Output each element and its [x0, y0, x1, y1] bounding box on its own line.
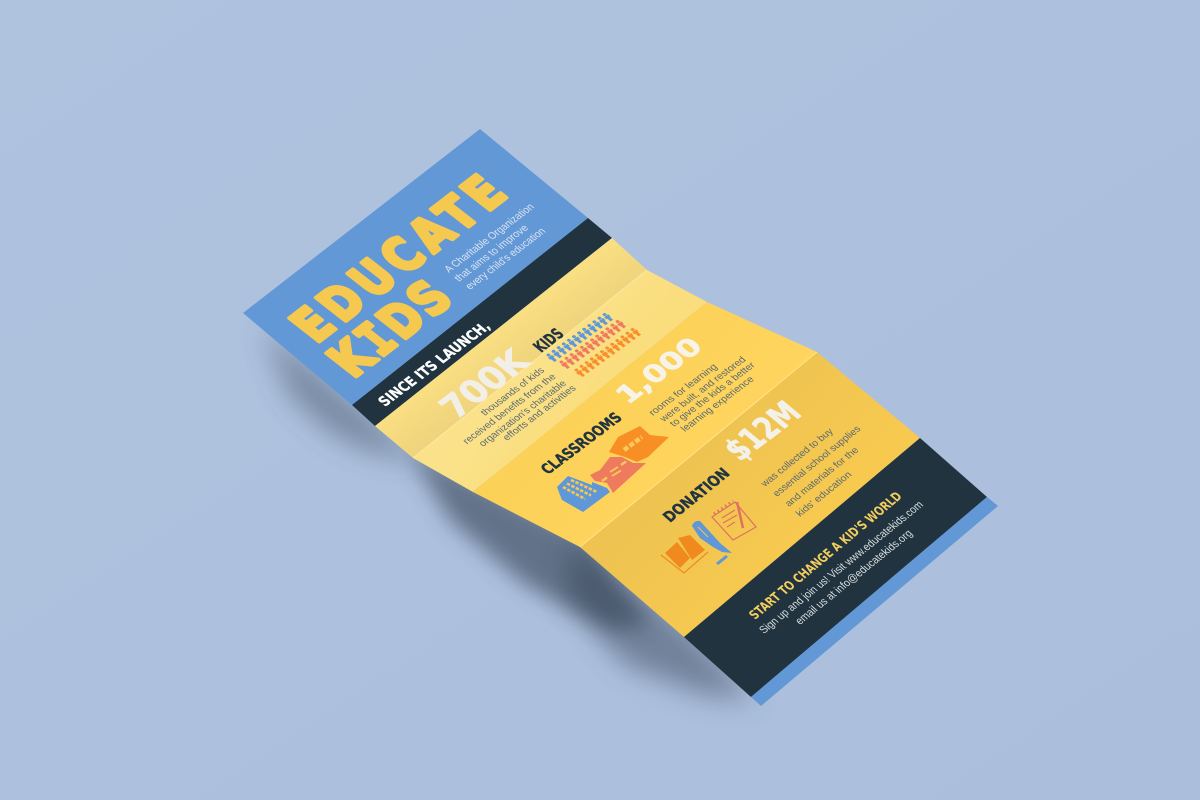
heading: since its launch: SINCE ITS LAUNCH,	[374, 318, 494, 410]
number: 700K: 700K	[431, 342, 540, 426]
text: kids description: organization's charitable	[477, 379, 570, 449]
panel: dark band	[352, 218, 612, 426]
panel: dark footer	[684, 438, 987, 697]
icon: notepad	[712, 501, 756, 540]
panel: pale yellow lower fold	[413, 270, 707, 492]
icon: school buildings	[557, 426, 669, 512]
text: classrooms description: learning experience	[679, 374, 757, 434]
icon: open book	[661, 535, 708, 573]
text: kids description: efforts and activities	[501, 384, 579, 443]
footer call to action	[746, 489, 926, 636]
panel: donation yellow	[580, 352, 920, 637]
text: donation description: essential school supplies	[771, 424, 863, 499]
text: donation description: was collected to buy	[758, 427, 836, 490]
number: $12M: $12M	[716, 395, 810, 468]
heading: start to change: START TO CHANGE A KID'S WORLD	[746, 489, 906, 623]
title: KIDS	[315, 271, 465, 387]
paper shadows	[262, 325, 755, 700]
panel: pale yellow upper fold	[375, 238, 647, 458]
text: contact details: Sign up and join us! Visit www.educatekids.com	[757, 500, 926, 636]
stat: 700K kids	[431, 312, 642, 449]
text: donation description: and materials for the	[783, 445, 862, 509]
panel: classrooms yellow	[473, 302, 817, 547]
text: kids description: received benefits from the	[461, 372, 559, 446]
subtitle: A Charitable Organization	[442, 202, 537, 275]
text: donation description	[758, 424, 863, 519]
label: classrooms: CLASSROOMS	[536, 409, 626, 478]
panel: blue header	[243, 129, 588, 405]
text: donation description: kids' education	[794, 470, 855, 519]
panel: blue footer strip	[751, 497, 998, 706]
text: classrooms description: were built, and restored	[657, 355, 749, 425]
stat: 1,000 classrooms	[536, 333, 758, 512]
label: kids: KIDS	[529, 325, 569, 356]
text: classrooms description: to give the kids a better	[668, 360, 758, 429]
title: EDUCATE	[278, 166, 519, 352]
icon: pen	[692, 521, 732, 564]
text: classrooms description: rooms for learning	[647, 362, 720, 418]
subtitle: every child's education	[463, 226, 549, 292]
number: 1,000: 1,000	[610, 333, 709, 409]
stat: $12M donation	[659, 395, 863, 573]
icon: rows of children	[545, 312, 642, 378]
folded leaflet	[243, 129, 998, 706]
subtitle: that aims to improve	[452, 223, 531, 284]
text: kids description: thousands of kids	[479, 366, 547, 418]
label: donation: DONATION	[659, 464, 734, 526]
text: contact details: email us at info@educatekids.org	[793, 528, 915, 627]
